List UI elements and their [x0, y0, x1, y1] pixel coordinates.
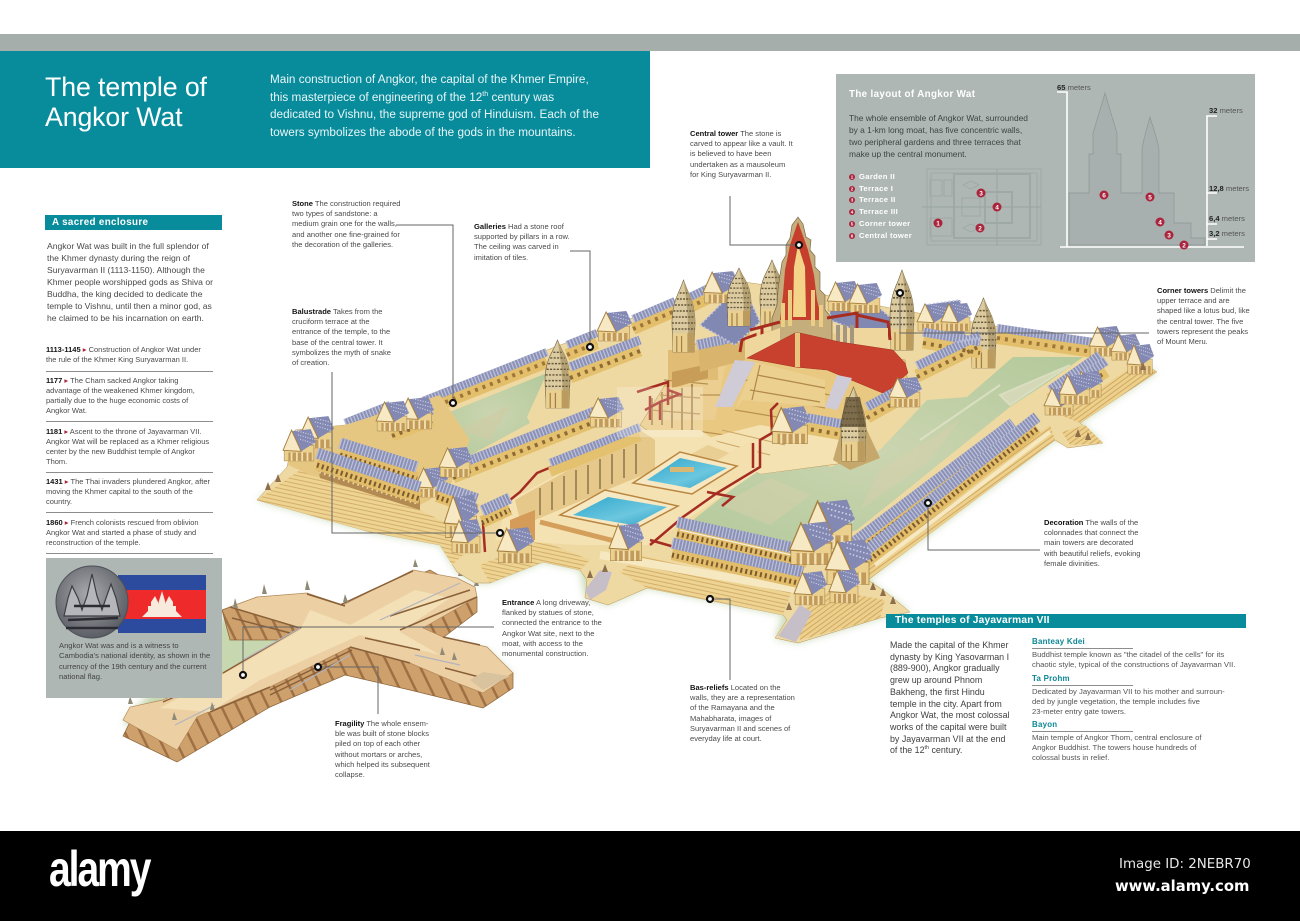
timeline 1860: Angkor Wat and started a phase of study and [46, 528, 196, 537]
callout: galleries: imitation of tiles. [474, 253, 528, 262]
intro text: Main construction of Angkor, the capital of the Khmer Empire, [270, 73, 589, 86]
section text: he claimed to be his incarnation on earth. [47, 313, 204, 323]
timeline 1431: country. [46, 497, 72, 506]
callout: corner towers [1157, 286, 1250, 346]
timeline 1860: 1860 ▸ French colonists rescued from oblivion [46, 518, 199, 527]
section text: the Khmer dynasty during the reign of [47, 253, 190, 263]
callout: stone: two types of sandstone: a [292, 209, 378, 218]
text: Main temple of Angkor Thom, central enclosure of [1032, 733, 1202, 742]
callout: corner towers: towers represent the peaks [1157, 327, 1248, 336]
coin caption: Cambodia's national identity, as shown in the [59, 651, 210, 660]
intro text: this masterpiece of engineering of the 12th century was [270, 91, 554, 104]
text: Angkor Buddhist. The towers house hundreds of [1032, 743, 1196, 752]
callout: bas-reliefs [690, 683, 795, 743]
callout: balustrade: symbolizes the myth of snake [292, 348, 391, 357]
callout: central tower: Central tower The stone is [690, 129, 781, 138]
back galleries [345, 275, 1093, 433]
text: chaotic style, typical of the constructions of Jayavarman VII. [1032, 660, 1235, 669]
callout: fragility: ble was built of stone blocks [335, 729, 429, 738]
callout: galleries: Galleries Had a stone roof [474, 222, 564, 231]
callout: bas-reliefs: of the Ramayana and the [690, 703, 775, 712]
timeline 1177: 1177 ▸ The Cham sacked Angkor taking [46, 376, 178, 385]
layout heading: The layout of Angkor Wat [849, 89, 975, 100]
callout: entrance: flanked by statues of stone, [502, 608, 594, 617]
callout: bas-reliefs: walls, they are a representation [690, 693, 795, 702]
timeline 1181: Angkor Wat will be replaced as a Khmer religious [46, 437, 209, 446]
callout markers [240, 242, 931, 678]
courtyard floor and columns [495, 430, 762, 548]
text: Dedicated by Jayavarman VII to his mother and surroun- [1032, 687, 1225, 696]
callout: fragility [335, 719, 430, 779]
numbered markers: 4 [1158, 220, 1162, 226]
numbered markers: 4 [995, 204, 999, 212]
Jayavarman intro text: by Jayavarman VII at the end [890, 734, 1005, 744]
callout: entrance: monumental construction. [502, 649, 588, 658]
coin [56, 566, 128, 638]
layout text: by a 1-km long moat, has five concentric walls, [849, 125, 1022, 135]
legend: Terrace I [859, 184, 893, 193]
callout: balustrade: entrance of the temple, to the [292, 327, 390, 336]
callout: central tower: for King Suryavarman II. [690, 170, 771, 179]
coin caption: Angkor Wat was and is a witness to [59, 641, 179, 650]
callout: central tower: is believed to have been [690, 149, 771, 158]
intro text: towers symbolizes the abode of the gods in the mountains. [270, 126, 576, 139]
callout: decoration: main towers are decorated [1044, 538, 1133, 547]
section text [47, 241, 213, 323]
timeline 1181: center by the new Buddhist temple of Angkor [46, 447, 195, 456]
panel: a sacred enclosure [45, 215, 222, 323]
legend: 1 [851, 175, 854, 180]
timeline 1113-1145: 1113-1145 ▸ Construction of Angkor Wat under [46, 345, 201, 354]
temple: Ta Prohm: Ta Prohm [1032, 674, 1070, 683]
left wing building mass [288, 395, 470, 510]
timeline 1181: 1181 ▸ Ascent to the throne of Jayavarman VII. [46, 427, 202, 436]
callout: central tower: undertaken as a mausoleum [690, 160, 785, 169]
footer url: www.alamy.com [1115, 878, 1249, 895]
Jayavarman intro text: dynasty by King Yasovarman I [890, 652, 1009, 662]
callout: galleries: The ceiling was carved in [474, 242, 559, 251]
temple: Banteay Kdei: Banteay Kdei [1032, 637, 1085, 646]
callout: corner towers: of Mount Meru. [1157, 337, 1208, 346]
stairways [715, 360, 852, 410]
header panel [0, 51, 650, 168]
top grey band [0, 34, 1300, 51]
legend: 2 [851, 187, 854, 192]
elevation axes [1057, 92, 1244, 247]
layout text: make up the central monument. [849, 149, 967, 159]
legend: Central tower [859, 231, 912, 240]
left inner pavilions [283, 371, 1103, 497]
numbered markers: 2 [978, 226, 982, 232]
central terrace block [640, 325, 908, 474]
Jayavarman intro text: works of the capital were built [890, 722, 1006, 732]
callout: entrance: Entrance A long driveway, [502, 598, 590, 607]
callout: bas-reliefs: Mahabharata, images of [690, 714, 771, 723]
timeline 1431 [46, 477, 210, 506]
callout: stone: Stone The construction required [292, 199, 401, 208]
site plan [922, 169, 1041, 245]
timeline 1860 [46, 518, 199, 547]
callout: corner towers: Corner towers Delimit the [1157, 286, 1246, 295]
callout: fragility: piled on top of each other [335, 739, 420, 748]
panel: national identity [46, 558, 222, 698]
faded wash [617, 387, 703, 437]
callout: corner towers: the central tower. The five [1157, 317, 1243, 326]
timeline 1181: Thom. [46, 457, 67, 466]
timeline 1177: partially due to the huge economic costs of [46, 396, 188, 405]
text: ded by jungle vegetation, the temple includes five [1032, 697, 1200, 706]
callout: bas-reliefs: Bas-reliefs Located on the [690, 683, 781, 692]
coin caption: currency of the 19th century and the current [59, 662, 206, 671]
layout text: two peripheral gardens and three terraces that [849, 137, 1021, 147]
mid gallery with red edge [550, 427, 640, 472]
panel: temples of Jayavarman VII [886, 614, 1246, 628]
section heading: A sacred enclosure [52, 217, 148, 228]
callout: galleries [474, 222, 570, 262]
timeline 1431: moving the Khmer capital to the south of the [46, 487, 193, 496]
legend: Garden II [859, 172, 895, 181]
panel: layout of Angkor Wat [836, 74, 1255, 262]
legend: Terrace III [859, 207, 898, 216]
intro text: dedicated to Vishnu, the supreme god of Hinduism. Each of the [270, 108, 599, 121]
platform retaining walls [257, 365, 1157, 640]
timeline 1177: advantage of the weakened Khmer kingdom, [46, 386, 195, 395]
timeline 1113-1145: the rule of the Khmer King Suryavarman II. [46, 355, 188, 364]
coin caption [59, 641, 210, 681]
callout: entrance: connected the entrance to the [502, 618, 602, 627]
ground shadow [123, 345, 1157, 752]
causeway cross [123, 559, 513, 762]
callout: fragility: without mortars or arches, [335, 750, 422, 759]
red section plane [747, 333, 908, 394]
legend: 3 [851, 198, 854, 203]
title: Angkor Wat [45, 102, 182, 132]
numbered markers [934, 188, 1188, 250]
height labels: 6,4 meters [1209, 214, 1245, 223]
callout: fragility: Fragility The whole ensem- [335, 719, 428, 728]
panel: temples of Jayavarman VII: The temples of Jayavarman VII [895, 615, 1050, 626]
callout: fragility: which helped its subsequent [335, 760, 430, 769]
Jayavarman intro text: temple in the city. Apart from [890, 699, 1002, 709]
flag of Cambodia [118, 575, 206, 633]
callout: decoration: with beautiful reliefs, evoking [1044, 549, 1140, 558]
section text: temple to Vishnu, until then a minor god, as [47, 301, 212, 311]
height labels: 12,8 meters [1209, 184, 1249, 193]
title [45, 72, 207, 132]
text: Buddhist temple known as "the citadel of the cells" for its [1032, 650, 1224, 659]
timeline [46, 345, 213, 554]
cut-away red walls [483, 382, 778, 552]
callout: stone: and another one fine-grained for [292, 230, 400, 239]
Jayavarman intro text: Angkor Wat, the most colossal [890, 710, 1010, 720]
callout: entrance: Angkor Wat site, next to the [502, 629, 594, 638]
layout text: The whole ensemble of Angkor Wat, surrounded [849, 113, 1028, 123]
section text: Suryavarman II (1113-1150). Although the [47, 265, 205, 275]
section text: Khmer people worshipped gods as Shiva or [47, 277, 213, 287]
legend: 6 [851, 234, 854, 239]
section text: Buddha, the king decided to dedicate the [47, 289, 202, 299]
section text: Angkor Wat was built in the full splendor of [47, 241, 209, 251]
corner pavilions [265, 344, 1154, 642]
callout: stone: medium grain one for the walls, [292, 219, 397, 228]
coin caption: national flag. [59, 672, 102, 681]
outer platform [257, 280, 1157, 643]
footer brand: alamy [49, 841, 149, 897]
gardens [437, 357, 1083, 547]
footer bar [0, 831, 1300, 921]
callout: stone: the decoration of the galleries. [292, 240, 393, 249]
elevation silhouette [1069, 93, 1205, 245]
numbered markers: 6 [1102, 192, 1106, 200]
temple: Bayon: Bayon [1032, 720, 1057, 729]
callout: balustrade: Balustrade Takes from the [292, 307, 382, 316]
callout: balustrade [292, 307, 391, 367]
Jayavarman intro text: grew up around Phnom [890, 675, 982, 685]
text: 23-meter entry gate towers. [1032, 707, 1126, 716]
numbered markers: 1 [936, 220, 940, 228]
central tower cut-away [740, 217, 890, 358]
callout: central tower: carved to appear like a vault. It [690, 139, 793, 148]
callout: decoration [1044, 518, 1140, 568]
callout: fragility: collapse. [335, 770, 365, 779]
callout: balustrade: of creation. [292, 358, 329, 367]
callout: corner towers: upper terrace and are [1157, 296, 1230, 305]
numbered markers: 2 [1182, 242, 1186, 250]
callout: galleries: supported by pillars in a row. [474, 232, 570, 241]
timeline 1860: reconstruction of the temple. [46, 538, 141, 547]
callout: balustrade: cruciform terrace at the [292, 317, 370, 326]
title: The temple of [45, 72, 207, 102]
timeline 1113-1145 [46, 345, 201, 364]
inner rooflets and back towers [545, 260, 1140, 408]
callout: bas-reliefs: Suryavarman II and scenes of [690, 724, 790, 733]
height labels: 65 meters [1057, 83, 1091, 92]
legend: Terrace II [859, 195, 896, 204]
callout: central tower [690, 129, 793, 179]
timeline 1431: 1431 ▸ The Thai invaders plundered Angkor, after [46, 477, 210, 486]
numbered markers: 5 [1148, 194, 1152, 202]
numbered markers: 3 [1167, 232, 1171, 240]
callout: decoration: female divinities. [1044, 559, 1100, 568]
Jayavarman intro text: of the 12th century. [890, 745, 962, 755]
inner galleries [392, 332, 1106, 478]
callout: bas-reliefs: everyday life at court. [690, 734, 762, 743]
Jayavarman intro text: Made the capital of the Khmer [890, 640, 1008, 650]
timeline 1177: Angkor Wat. [46, 406, 87, 415]
timeline 1181 [46, 427, 209, 466]
front tower [771, 387, 880, 470]
image id: Image ID: 2NEBR70 [1119, 857, 1251, 872]
legend: 5 [851, 222, 854, 227]
section heading [45, 215, 222, 230]
height labels: 3,2 meters [1209, 229, 1245, 238]
water basins [540, 452, 737, 545]
callout: entrance [502, 598, 602, 658]
callout: stone [292, 199, 401, 249]
text: colossal busts in relief. [1032, 753, 1109, 762]
legend [849, 172, 912, 240]
callout: decoration: Decoration The walls of the [1044, 518, 1138, 527]
callout: balustrade: base of the central tower. It [292, 338, 383, 347]
legend: Corner tower [859, 219, 910, 228]
callout: decoration: colonnades that connect the [1044, 528, 1138, 537]
height labels [1057, 83, 1249, 238]
height labels: 32 meters [1209, 106, 1243, 115]
layout text [849, 113, 1028, 159]
Jayavarman intro text: Bakheng, the first Hindu [890, 687, 985, 697]
callout: corner towers: shaped like a lotus bud, like [1157, 306, 1250, 315]
intro text [270, 73, 599, 139]
front galleries [317, 417, 1037, 584]
Jayavarman intro text: (889-900), Angkor gradually [890, 663, 1000, 673]
timeline 1177 [46, 376, 195, 415]
legend: 4 [851, 210, 854, 215]
callout: entrance: moat, with access to the [502, 639, 583, 648]
leader lines [243, 196, 1149, 714]
numbered markers: 3 [979, 190, 983, 198]
Jayavarman intro text [890, 640, 1010, 755]
